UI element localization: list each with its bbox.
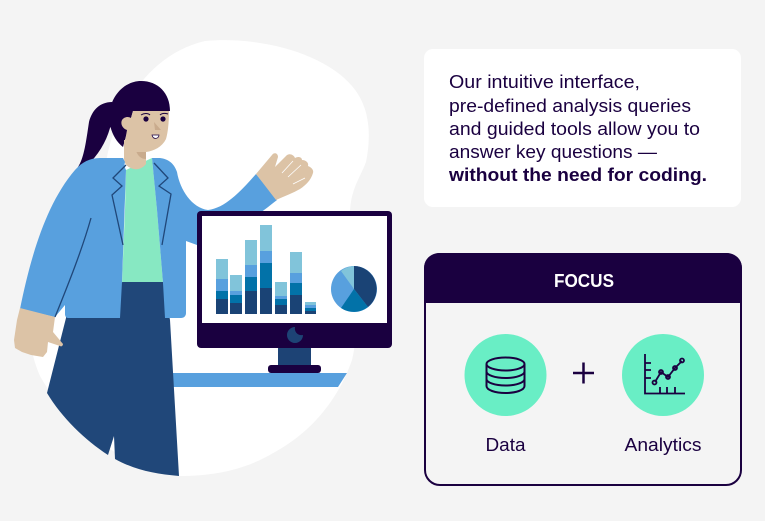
trousers — [47, 282, 179, 476]
jacket right — [152, 158, 277, 318]
focus panel — [424, 253, 742, 485]
stand — [278, 345, 311, 367]
white blob background — [28, 40, 369, 476]
hair — [109, 81, 170, 147]
paragraph text: and guided tools allow you to — [449, 119, 700, 139]
label: analytics: Analytics — [624, 435, 702, 455]
neck shadow — [136, 151, 146, 159]
frame — [197, 211, 392, 348]
screen — [202, 216, 387, 323]
focus heading: FOCUS — [554, 271, 614, 291]
mouth — [152, 135, 159, 138]
paragraph text — [448, 72, 707, 185]
label: data: Data — [486, 435, 527, 455]
finger creases — [282, 161, 305, 184]
illustration: woman presenting — [14, 81, 347, 476]
nose — [154, 122, 161, 130]
paragraph text: answer key questions — — [449, 142, 657, 162]
hand right raised — [256, 153, 313, 200]
monitor — [197, 211, 392, 373]
icon: database — [464, 334, 546, 416]
icon: analytics chart — [622, 334, 704, 416]
teal top — [122, 158, 163, 283]
paragraph text: without the need for coding. — [448, 165, 707, 185]
neck — [124, 140, 146, 169]
logo — [287, 327, 303, 343]
text card — [424, 49, 741, 207]
focus header — [424, 253, 742, 303]
paragraph text: pre-defined analysis queries — [449, 96, 691, 116]
face — [121, 111, 169, 152]
jacket left — [20, 158, 126, 318]
pie chart — [331, 266, 377, 312]
paragraph text: Our intuitive interface, — [449, 72, 640, 92]
ponytail — [78, 102, 118, 169]
hand left — [14, 308, 63, 357]
bar chart — [216, 225, 316, 314]
eyes — [141, 113, 168, 122]
base — [268, 365, 321, 373]
plus sign — [573, 362, 594, 384]
lapels — [55, 163, 171, 317]
desk — [170, 373, 347, 387]
